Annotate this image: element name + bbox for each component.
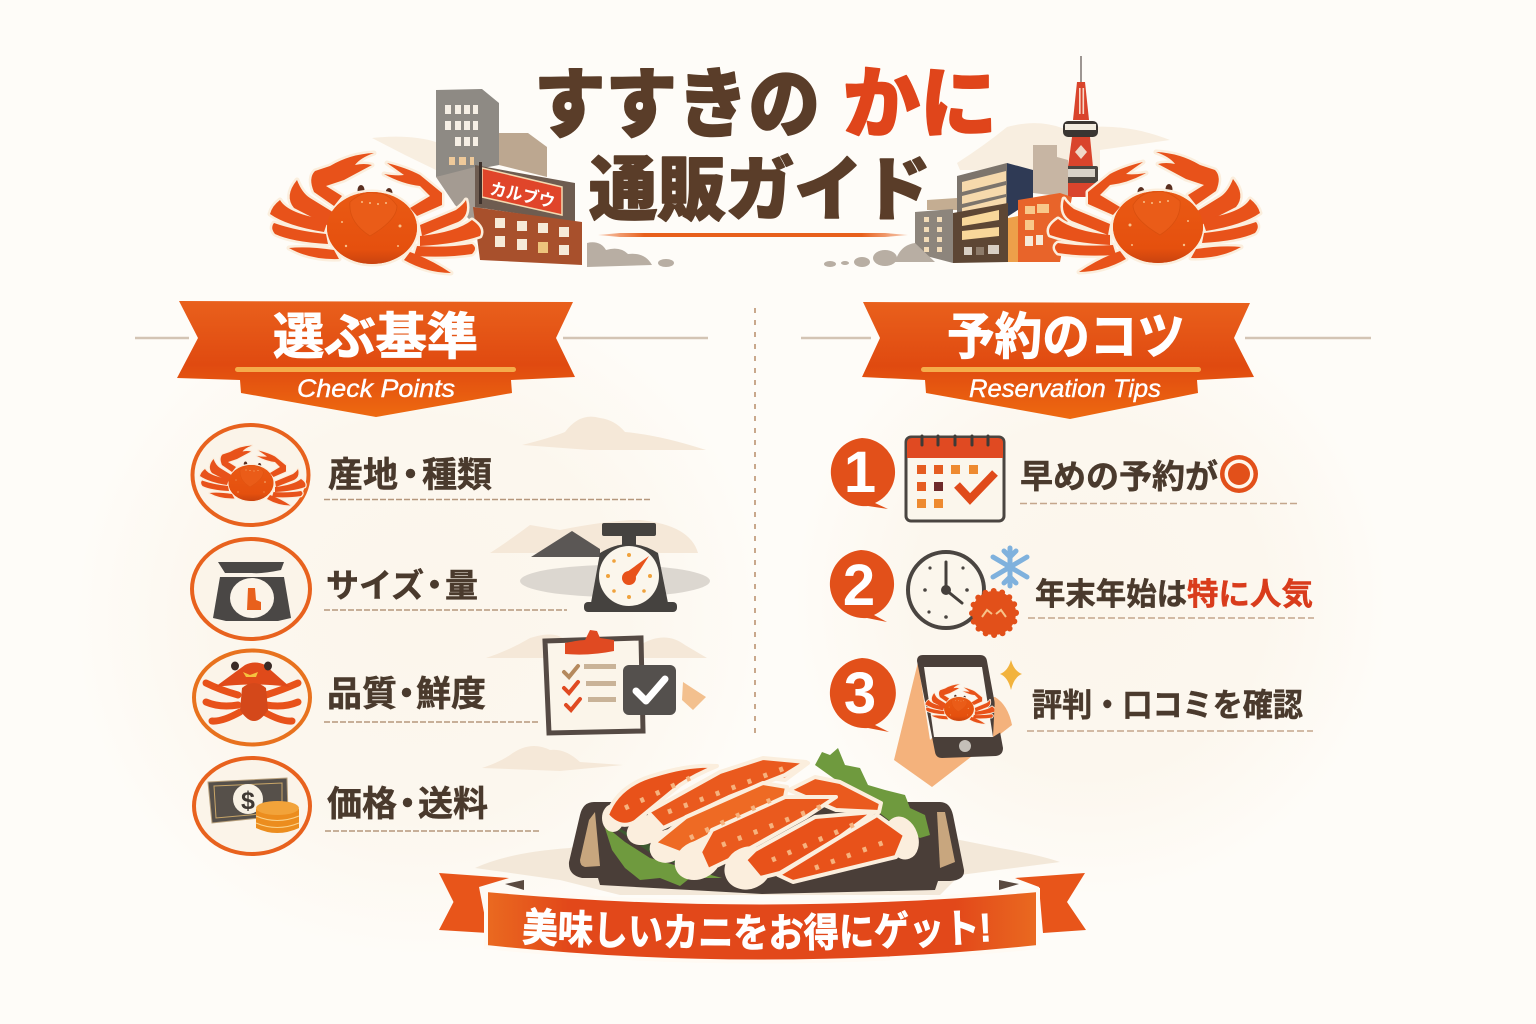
orange building: [1008, 193, 1072, 262]
label: 産地・種類: [328, 456, 492, 495]
red sign: [479, 162, 562, 215]
meat speckles: [625, 768, 885, 868]
illustration: checklist: [545, 630, 706, 733]
title underline: [598, 233, 908, 237]
subheading: Check Points: [297, 375, 455, 403]
smoke puffs: [587, 242, 674, 267]
tip 2: [830, 548, 1314, 635]
label: 品質・鮮度: [327, 675, 486, 714]
label: 価格・送料: [327, 785, 488, 824]
icon: calendar: [906, 436, 1004, 521]
beige building: [1033, 145, 1068, 197]
leg B: [625, 758, 806, 848]
platter shadow: [475, 838, 1060, 895]
bottom ribbon: [439, 873, 1086, 960]
subheading: Reservation Tips: [969, 375, 1161, 403]
garnish leaves: [604, 748, 930, 886]
label: 早めの予約が: [1020, 458, 1218, 495]
item: price and shipping: [194, 758, 540, 854]
icon: crab badge: [972, 591, 1016, 635]
grey annex: [436, 167, 483, 225]
tan back building: [499, 133, 547, 177]
header illustration right: [824, 56, 1170, 267]
small grey building: [915, 198, 957, 263]
striped office: [957, 163, 1007, 217]
main title: [534, 60, 997, 237]
title line 1: すすきの: [534, 63, 820, 148]
number bubble: 3: [844, 661, 876, 726]
ribbon shape: [177, 301, 575, 417]
icon: crab underside: [194, 650, 310, 744]
number bubble: [830, 658, 896, 732]
platter: [569, 802, 964, 894]
brown building: [953, 203, 1008, 263]
leg A: [604, 766, 717, 830]
header illustration left: [372, 89, 674, 267]
icon: snowflake: [993, 548, 1027, 586]
item: quality and freshness: [194, 650, 538, 744]
label: 評判・口コミを確認: [1032, 687, 1303, 723]
tower: [1063, 56, 1098, 197]
ribbon body: [486, 890, 1038, 962]
label: サイズ・量: [326, 567, 478, 604]
ribbon folds: [505, 880, 1019, 890]
double circle mark: [1220, 455, 1258, 493]
crab left: [270, 153, 481, 273]
navy side: [1007, 163, 1033, 217]
red sign: カルブウ: [488, 178, 557, 212]
banner: check points: [135, 301, 708, 417]
label: 年末年始は: [1035, 577, 1187, 612]
brick building: [473, 207, 582, 265]
sign building: [475, 165, 575, 222]
number bubble: 2: [843, 553, 875, 618]
title line 2: 通販ガイド: [589, 151, 931, 229]
tan haze: [372, 137, 440, 172]
illustration: scale and hill: [520, 523, 710, 612]
clouds left panel: [482, 417, 707, 771]
icon: hand and phone: [894, 655, 1012, 787]
number bubble: 1: [844, 440, 876, 505]
icon: sparkle: [1000, 660, 1022, 690]
leg C: [646, 783, 787, 867]
small legs behind: [763, 763, 808, 780]
smoke puffs: [824, 243, 935, 267]
ribbon tails: [439, 873, 1086, 933]
tip 1: [831, 436, 1297, 521]
ribbon shape: [862, 302, 1254, 419]
vertical divider: [754, 308, 756, 740]
leg D: [671, 797, 836, 885]
item: size and amount: [192, 539, 567, 639]
call to action: 美味しいカニをお得にゲット!: [522, 907, 989, 951]
leg F: [778, 814, 922, 882]
number bubble: [830, 550, 894, 622]
crab leg platter: [475, 748, 1060, 895]
icon: crab: [192, 425, 308, 525]
heading: 予約のコツ: [947, 309, 1185, 365]
icon: clock: [908, 552, 984, 628]
icon: kitchen scale: [192, 539, 310, 639]
leg E: [720, 812, 874, 895]
item: origin and species: [192, 425, 652, 525]
tan haze: [957, 123, 1170, 170]
tip 3: [830, 655, 1313, 787]
tall grey building: [436, 89, 499, 177]
crab right: [1049, 152, 1260, 272]
icon: bill and coins: [194, 758, 310, 854]
title accent: かに: [843, 60, 997, 148]
highlighted label: 特に人気: [1187, 577, 1313, 612]
heading: 選ぶ基準: [273, 309, 478, 365]
icon: bill and coins: $: [241, 787, 255, 815]
crab legs: [604, 758, 922, 895]
banner: reservation tips: [801, 302, 1371, 419]
number bubble: [831, 438, 895, 509]
